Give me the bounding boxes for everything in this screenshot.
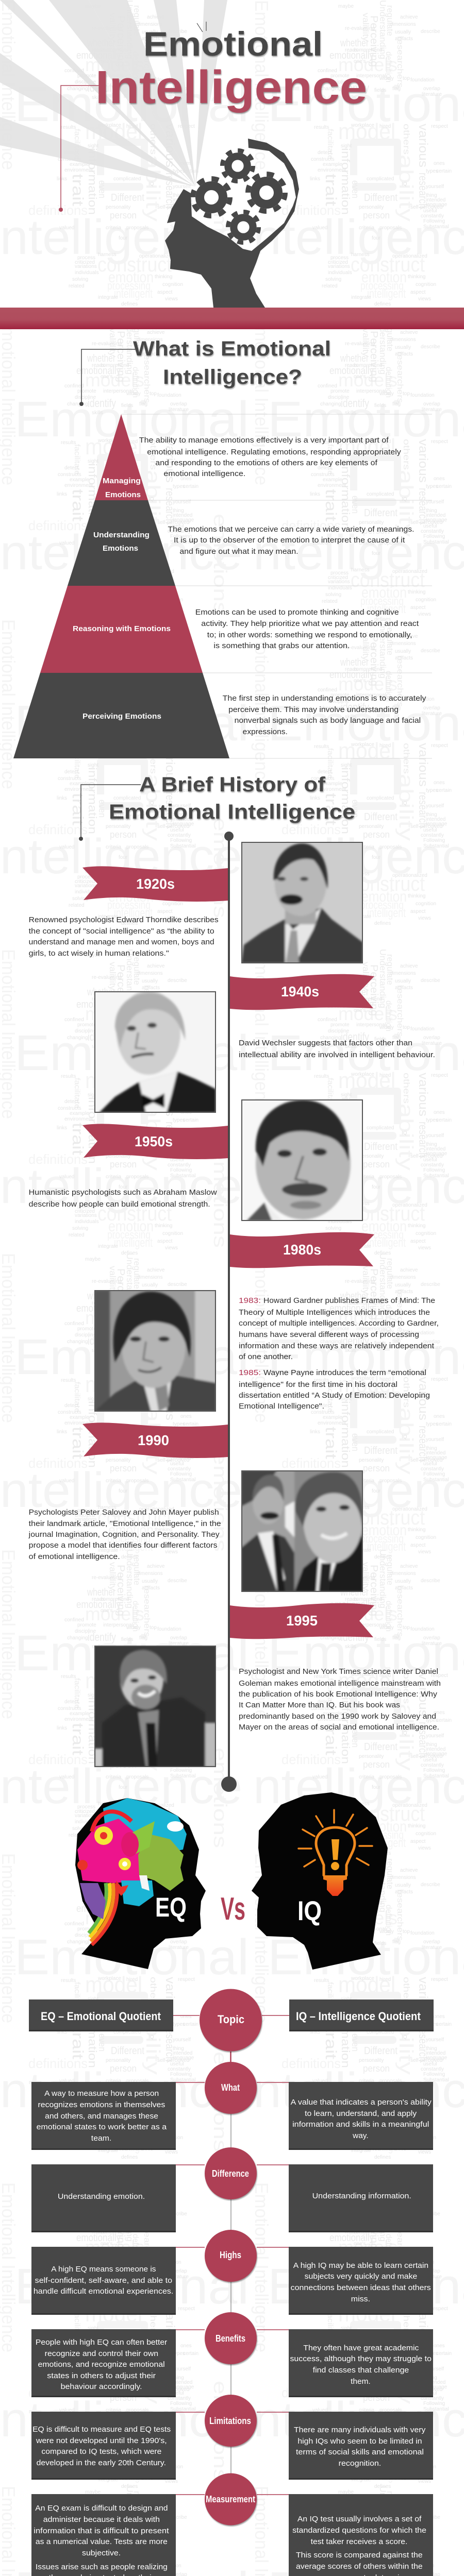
text: 1990: propose a model that identifies four different factors <box>29 1541 218 1550</box>
IQ what box: to learn, understand, and apply <box>305 2109 417 2118</box>
IQ limitations box: high IQs who seem to be limited in <box>297 2437 422 2446</box>
pyramid tier: reasoning with emotions: Reasoning with Emotions <box>73 624 171 633</box>
text: 1990: Psychologists Peter Salovey and John Mayer publish <box>29 1508 219 1517</box>
timeline ribbon: 1940s <box>230 974 374 1010</box>
EQ limitations box <box>31 2412 176 2480</box>
IQ benefits box: success, although they may struggle to <box>290 2354 432 2363</box>
main title: Emotional <box>143 25 323 63</box>
measurement circle: Measurement <box>206 2494 255 2504</box>
text: 1995: It Can Matter More than IQ. But his book was <box>239 1701 400 1709</box>
photo: Edward Thorndike <box>241 842 363 963</box>
IQ measurement box <box>289 2494 433 2576</box>
main title <box>95 22 367 113</box>
EQ what box <box>31 2082 176 2150</box>
difference circle: Difference <box>212 2168 249 2179</box>
measurement circle <box>205 2473 257 2526</box>
EQ limitations box: were not developed until the 1990's, <box>36 2436 167 2445</box>
text: 1980s: of one another. <box>239 1352 293 1361</box>
text block: reasoning with emotions: is something that grabs our attention. <box>213 641 350 650</box>
text: 1940s: David Wechsler suggests that factors other than <box>239 1039 412 1047</box>
text block: reasoning with emotions: Emotions can be used to promote thinking and cognitive <box>195 608 399 617</box>
EQ what box: team. <box>91 2134 111 2143</box>
what circle: What <box>221 2082 240 2093</box>
pyramid tier: perceiving emotions: Perceiving Emotions <box>82 712 161 721</box>
text: 1980s: concept of multiple intelligences. According to Gardner, <box>239 1319 439 1328</box>
heading: what is emotional intelligence: Intelligence? <box>163 366 302 388</box>
text block: managing emotions: emotional intelligence. Regulating emotions, responding appropriately <box>147 448 401 456</box>
EQ measurement box: subjective. <box>82 2549 121 2557</box>
bulb <box>299 1810 372 1875</box>
label: EQ: EQ <box>155 1892 187 1923</box>
comparison row: limitations <box>31 2395 433 2480</box>
EQ limitations box: developed in the early 20th Century. <box>37 2459 166 2467</box>
EQ benefits box: behaviour accordingly. <box>61 2382 142 2391</box>
main title: Intelligence <box>95 62 367 113</box>
text: 1940s <box>239 1039 435 1059</box>
timeline ribbon: 1980s: 1980s <box>283 1242 321 1258</box>
text block: perceiving emotions: perceive them. This may involve understanding <box>228 705 399 714</box>
text: 1980s: intelligence" for the first time in his doctoral <box>239 1380 397 1389</box>
IQ highs box <box>289 2247 433 2315</box>
EQ benefits box: People with high EQ can often better <box>36 2338 167 2347</box>
EQ difference box <box>31 2164 176 2232</box>
text block: managing emotions: emotional intelligence. <box>163 469 245 478</box>
rainbow swirl <box>89 1883 117 1945</box>
timeline ribbon: 1980s <box>230 1232 374 1268</box>
timeline spine <box>221 832 237 1792</box>
EQ benefits box <box>31 2329 176 2397</box>
text: 1995: the publication of his book Emotional Intelligence: Why <box>239 1690 438 1699</box>
pyramid tier: understanding emotions: Emotions <box>103 544 138 553</box>
highs circle: Highs <box>220 2250 241 2260</box>
text: 1920s: girls, to act wisely in human relations." <box>29 949 169 958</box>
IQ limitations box <box>289 2412 433 2480</box>
EQ difference box: Understanding emotion. <box>58 2192 145 2201</box>
text: 1990: their landmark article, "Emotional Intelligence," in the <box>29 1519 221 1528</box>
heading: brief history: A Brief History of <box>139 773 326 796</box>
text: 1920s: the concept of "social intelligence" as “the ability to <box>29 927 214 936</box>
icon: EQ colourful head <box>75 1798 206 1969</box>
IQ highs box: A high IQ may be able to learn certain <box>293 2261 428 2270</box>
pyramid tier: understanding emotions: Understanding <box>93 531 150 539</box>
IQ what box: A value that indicates a person's ability <box>291 2098 432 2107</box>
IQ limitations box: recognition. <box>339 2459 381 2468</box>
timeline ribbon: 1920s: 1920s <box>136 876 175 892</box>
EQ highs box: A high EQ means someone is <box>51 2265 156 2274</box>
text: 1990: of emotional intelligence. <box>29 1552 120 1561</box>
IQ header box: IQ – Intelligence Quotient <box>296 2010 421 2023</box>
EQ benefits box: states in others to adjust their <box>47 2371 156 2380</box>
timeline ribbon: 1995 <box>230 1603 374 1639</box>
label: Vs: Vs <box>221 1891 245 1927</box>
text block: understanding emotions: It is up to the observer of the emotion to interpret the cause of it <box>174 536 405 545</box>
text block: perceiving emotions: The first step in understanding emotions is to accurately <box>223 694 426 703</box>
comparison row: highs <box>31 2230 433 2315</box>
limitations circle: Limitations <box>209 2416 251 2426</box>
comparison row: measurement <box>31 2473 433 2576</box>
EQ measurement box: An EQ exam is difficult to design and <box>35 2504 168 2513</box>
text: 1980s <box>239 1296 439 1411</box>
IQ measurement box: test taker receives a score. <box>311 2537 407 2546</box>
label: IQ: IQ <box>297 1896 322 1926</box>
heading: brief history <box>79 773 355 841</box>
text: 1995: predominantly based on the 1990 work by Salovey and <box>239 1712 436 1721</box>
text: 1920s <box>29 916 219 958</box>
text: 1980s: Howard Gardner publishes Frames of Mind: The <box>263 1296 435 1305</box>
title leader line <box>59 86 101 212</box>
text: 1950s: Humanistic psychologists such as Abraham Maslow <box>29 1188 217 1197</box>
text block: managing emotions: and responding to the emotions of others are key elements of <box>155 459 378 467</box>
EQ what box: A way to measure how a person <box>44 2089 159 2098</box>
what circle <box>205 2062 257 2114</box>
highs circle <box>205 2230 257 2282</box>
text: 1980s: humans have several different ways of processing <box>239 1330 419 1339</box>
EQ what box: and others, and manages these <box>45 2112 158 2121</box>
IQ measurement box: standardized questions for which the <box>292 2526 426 2535</box>
timeline ribbon: 1995: 1995 <box>286 1613 318 1629</box>
IQ measurement box: An IQ test usually involves a set of <box>297 2515 422 2523</box>
IQ limitations box: There are many individuals with very <box>294 2426 426 2434</box>
EQ highs box: handle difficult emotional experiences. <box>34 2287 173 2296</box>
comparison: topic header <box>29 1989 434 2052</box>
pyramid tier: managing emotions: Emotions <box>105 490 141 499</box>
timeline ribbon: 1920s <box>82 866 228 902</box>
IQ header box <box>289 1999 434 2031</box>
text block: reasoning with emotions: to; in other words: something we respond to emotionally, <box>207 631 412 639</box>
text: 1980s: Emotional Intelligence". <box>239 1402 324 1411</box>
text: 1950s <box>29 1188 217 1209</box>
text: 1980s: dissertation entitled “A Study of Emotion: Developing <box>239 1391 430 1400</box>
IQ difference box: Understanding information. <box>312 2192 411 2200</box>
EQ benefits box: emotions, and recognize emotional <box>38 2360 165 2369</box>
photo: Salovey and Mayer <box>241 1470 363 1592</box>
text block: perceiving emotions: nonverbal signals such as body language and facial <box>235 716 421 725</box>
photo: Wayne Payne <box>94 1290 216 1412</box>
pyramid tier: managing emotions <box>95 414 148 500</box>
EQ limitations box: EQ is difficult to measure and EQ tests <box>32 2425 171 2434</box>
EQ highs box <box>31 2247 176 2315</box>
heading: what is emotional intelligence <box>79 337 331 406</box>
text block: understanding emotions: The emotions that we perceive can carry a wide variety of meanings. <box>168 525 415 534</box>
text: 1995: Psychologist and New York Times science writer Daniel <box>239 1667 438 1676</box>
EQ limitations box: compared to IQ tests, which were <box>41 2447 161 2456</box>
text block: understanding emotions: and figure out what it may mean. <box>179 547 299 556</box>
IQ benefits box: find classes that challenge <box>313 2366 409 2375</box>
heading: brief history: Emotional Intelligence <box>109 801 355 823</box>
EQ measurement box: Issues arise such as people realizing <box>36 2563 168 2571</box>
text block: perceiving emotions: expressions. <box>243 727 288 736</box>
text: 1995: Goleman makes emotional intelligence mainstream with <box>239 1679 441 1688</box>
text: 1940s: intellectual ability are involved in intelligent behaviour. <box>239 1050 435 1059</box>
timeline ribbon: 1940s: 1940s <box>281 984 319 999</box>
pyramid tier: managing emotions: Managing <box>103 477 141 485</box>
text: 1920s: Renowned psychologist Edward Thorndike describes <box>29 916 219 924</box>
timeline ribbon: 1990 <box>82 1422 228 1458</box>
IQ what box: information and skills in a meaningful <box>292 2120 429 2129</box>
IQ benefits box: them. <box>351 2377 371 2386</box>
text block: managing emotions: The ability to manage emotions effectively is a very important part of <box>139 436 389 445</box>
heading: what is emotional intelligence: What is Emotional <box>133 337 331 360</box>
timeline ribbon: 1950s: 1950s <box>135 1133 173 1149</box>
text block: reasoning with emotions: activity. They help prioritize what we pay attention and react <box>201 619 419 628</box>
text: 1920s: understand and manage men and women, boys and <box>29 938 214 946</box>
EQ header box <box>29 1999 173 2031</box>
text: 1995 <box>239 1667 441 1732</box>
IQ benefits box <box>289 2329 433 2397</box>
IQ measurement box: average scores of others within the <box>296 2562 423 2571</box>
timeline ribbon: 1950s <box>82 1124 228 1159</box>
text block: understanding emotions <box>168 525 415 556</box>
comparison row: difference <box>31 2147 433 2232</box>
pyramid tier: understanding emotions <box>68 500 175 586</box>
IQ difference box <box>289 2164 433 2232</box>
text: 1980s: 1983: <box>239 1296 261 1305</box>
pyramid tier: perceiving emotions <box>13 673 229 758</box>
text: 1980s: 1985: <box>239 1368 261 1377</box>
limitations circle <box>205 2395 257 2447</box>
text: 1980s: Theory of Multiple Intelligences which introduces the <box>239 1308 430 1317</box>
icon: head with gears <box>165 139 299 308</box>
IQ benefits box: They often have great academic <box>303 2344 419 2352</box>
EQ header box: EQ – Emotional Quotient <box>41 2010 161 2023</box>
text: 1980s: Wayne Payne introduces the term “emotional <box>263 1368 426 1377</box>
text: 1990 <box>28 1508 221 1561</box>
topic circle <box>200 1989 262 2052</box>
IQ what box: way. <box>352 2131 369 2140</box>
EQ measurement box: as a numerical value. Tests are more <box>36 2537 168 2546</box>
topic circle: Topic <box>218 2013 244 2026</box>
IQ highs box: miss. <box>351 2295 370 2303</box>
EQ highs box: self-confident, self-aware, and able to <box>35 2276 172 2285</box>
text: 1990: journal Imagination, Cognition, and Personality. They <box>28 1530 220 1539</box>
EQ what box: recognizes emotions in themselves <box>38 2100 165 2109</box>
EQ measurement box <box>31 2494 176 2576</box>
EQ what box: emotional states to work better as a <box>37 2123 167 2131</box>
text block: managing emotions <box>139 436 401 478</box>
text block: reasoning with emotions <box>195 608 419 650</box>
text: 1995: Mayer on the areas of social and emotional intelligence. <box>239 1723 439 1732</box>
IQ what box <box>289 2082 433 2150</box>
photo: David Wechsler <box>94 990 216 1113</box>
IQ highs box: subjects very quickly and make <box>305 2272 417 2281</box>
IQ measurement box: This score is compared against the <box>296 2551 423 2560</box>
difference circle <box>205 2147 257 2199</box>
EQ benefits box: recognize and control their own <box>45 2349 158 2358</box>
comparison spine <box>173 2015 289 2495</box>
photo: Daniel Goleman <box>94 1646 216 1767</box>
pyramid tier: reasoning with emotions <box>40 586 203 673</box>
IQ limitations box: terms of social skills and emotional <box>296 2448 424 2456</box>
text: 1950s: describe how people can build emotional strength. <box>29 1200 210 1209</box>
comparison row: benefits <box>31 2312 433 2397</box>
EQ measurement box: administer because it deals with <box>43 2515 160 2524</box>
icon: IQ head with lightbulb <box>252 1792 388 1970</box>
text: 1980s: information and these ways are relatively independent <box>239 1342 435 1350</box>
timeline ribbon: 1990: 1990 <box>138 1432 169 1448</box>
sunburst rays <box>0 0 227 187</box>
pyramid diagram <box>13 414 432 758</box>
EQ measurement box: information that is difficult to present <box>34 2527 170 2535</box>
text block: perceiving emotions <box>223 694 426 736</box>
benefits circle <box>205 2312 257 2364</box>
benefits circle: Benefits <box>216 2333 245 2344</box>
IQ highs box: connections between ideas that others <box>291 2283 431 2292</box>
photo: Howard Gardner <box>241 1099 363 1221</box>
comparison row: what <box>31 2062 433 2150</box>
crimson band <box>0 308 464 329</box>
